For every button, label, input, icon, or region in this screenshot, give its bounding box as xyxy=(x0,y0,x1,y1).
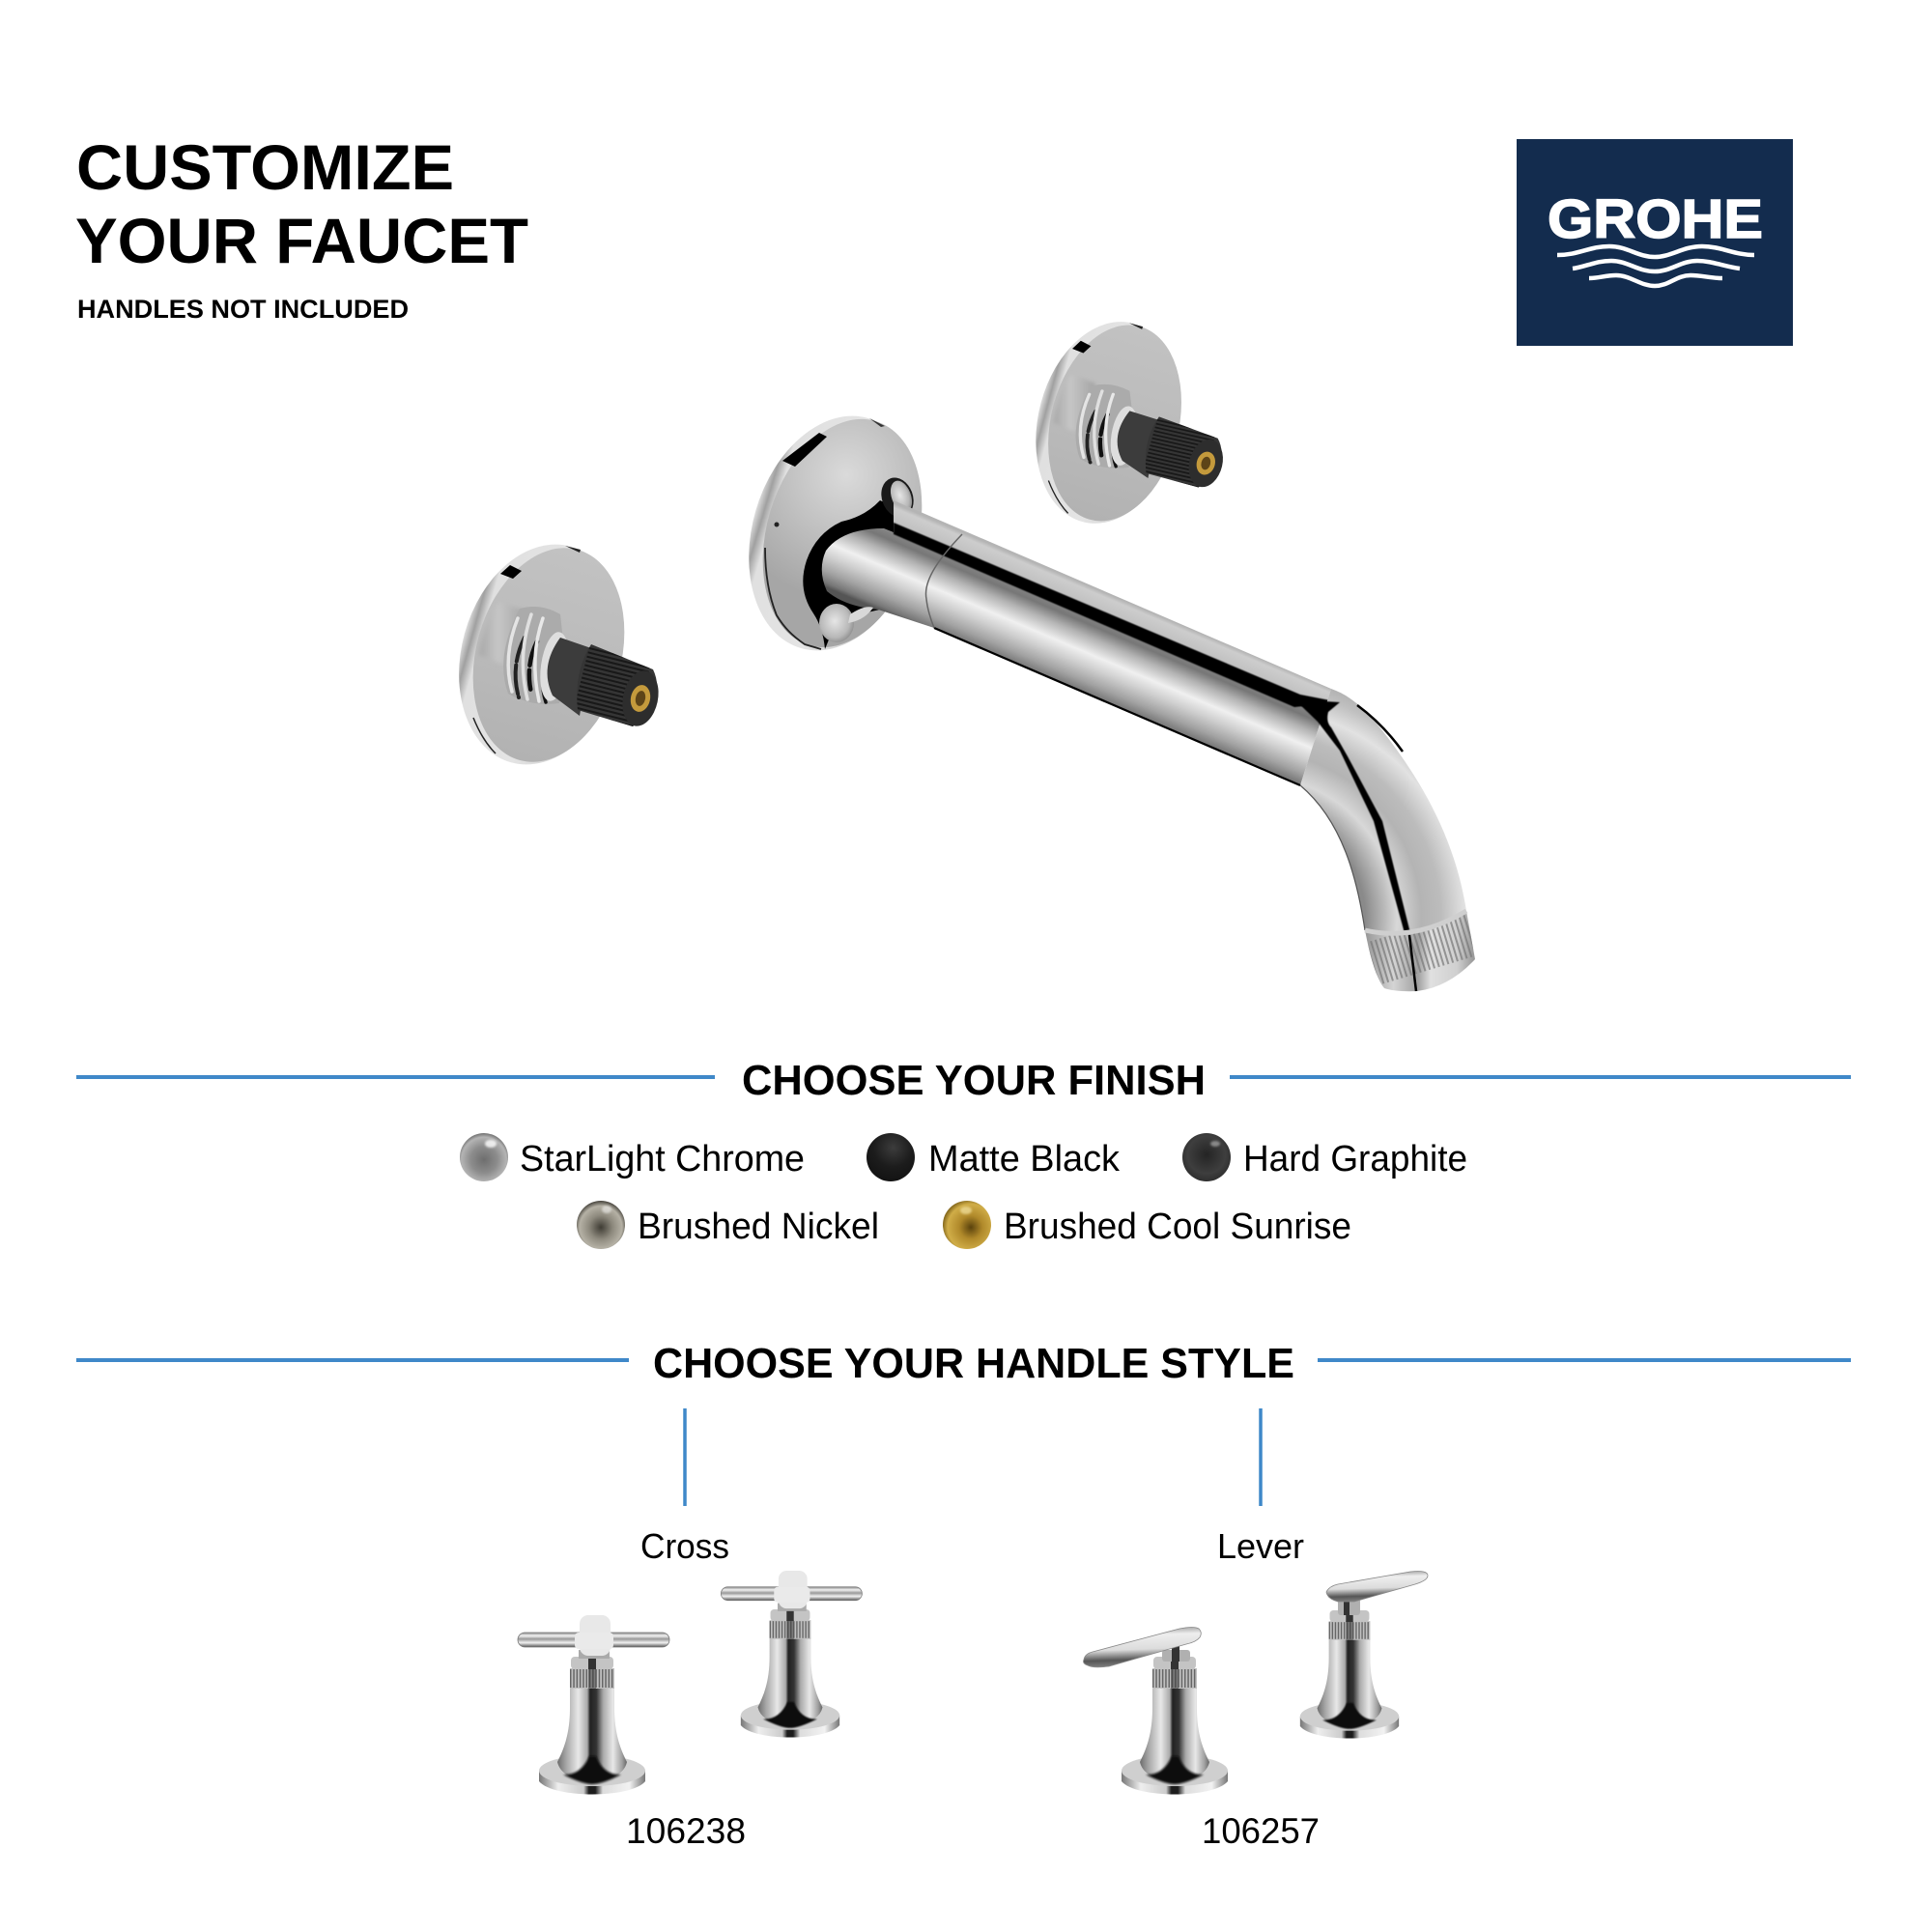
logo: GROHE xyxy=(1517,139,1793,346)
icon: left valve xyxy=(435,526,664,783)
panel: lever handle: Lever xyxy=(1217,1526,1304,1566)
panel: cross handle xyxy=(518,1408,862,1851)
icon: cross handles xyxy=(518,1571,862,1795)
icon: aerator xyxy=(1365,911,1475,991)
swatch: Brushed Nickel: Brushed Nickel xyxy=(638,1207,879,1247)
swatch: StarLight Chrome xyxy=(460,1133,805,1181)
swatch: Hard Graphite: Hard Graphite xyxy=(1243,1139,1467,1179)
panel: cross handle: 106238 xyxy=(626,1811,746,1851)
swatch: StarLight Chrome: StarLight Chrome xyxy=(520,1139,805,1179)
heading: choose your handle style: CHOOSE YOUR HANDLE STYLE xyxy=(653,1340,1294,1387)
logo: GROHE: GROHE xyxy=(1548,188,1763,250)
finish swatches xyxy=(460,1133,1467,1249)
icon: right valve xyxy=(1014,304,1228,541)
title xyxy=(75,131,528,276)
heading: choose your finish: CHOOSE YOUR FINISH xyxy=(742,1057,1206,1104)
panel: cross handle: Cross xyxy=(640,1526,729,1566)
icon: lever handles xyxy=(1084,1571,1428,1795)
subtitle: handles not included: HANDLES NOT INCLUDED xyxy=(77,295,409,324)
swatch: Matte Black: Matte Black xyxy=(928,1139,1121,1179)
swatch: Hard Graphite xyxy=(1182,1133,1467,1181)
icon: wall spout xyxy=(722,395,1475,991)
panel: lever handle: 106257 xyxy=(1202,1811,1320,1851)
swatch: Matte Black xyxy=(867,1133,1121,1181)
title: YOUR FAUCET xyxy=(75,205,528,276)
swatch: Brushed Nickel xyxy=(577,1201,879,1249)
panel: lever handle xyxy=(1084,1408,1428,1851)
swatch: Brushed Cool Sunrise: Brushed Cool Sunrise xyxy=(1004,1207,1351,1247)
title: CUSTOMIZE xyxy=(76,131,454,203)
